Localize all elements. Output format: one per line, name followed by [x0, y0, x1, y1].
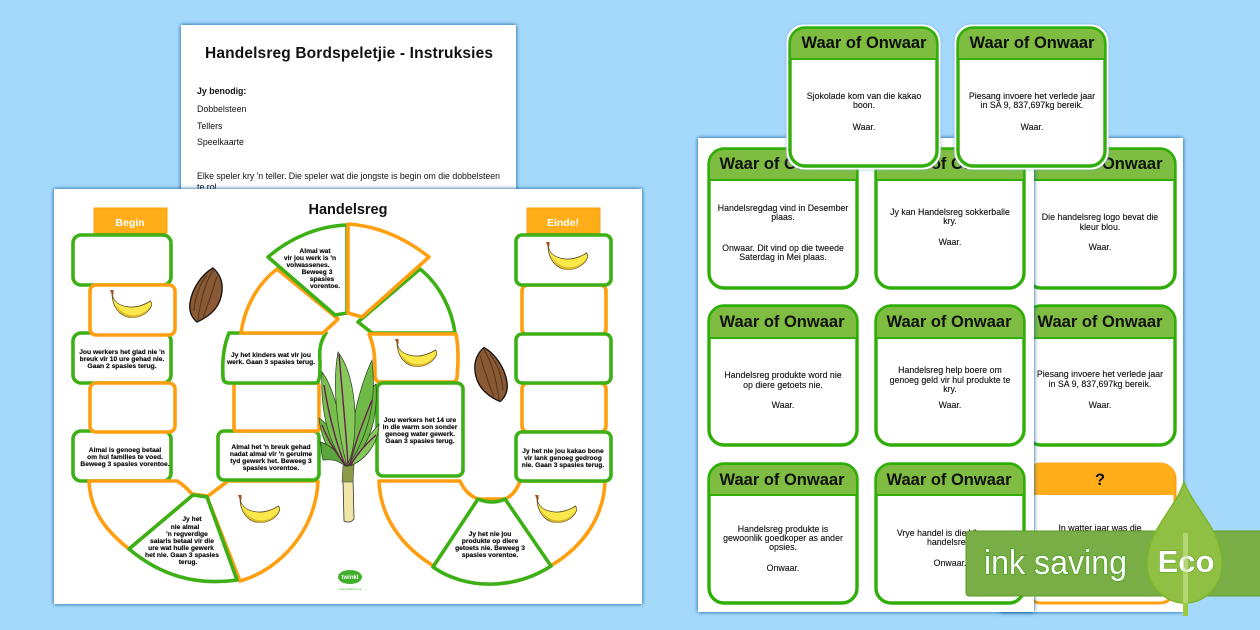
icon: drop: [1147, 482, 1222, 603]
left column text: Gaan 2 spasies terug.: [87, 363, 157, 370]
bottom left arc spaces: [89, 481, 318, 582]
inner left text: werk. Gaan 3 spasies terug.: [226, 359, 315, 366]
inner left text: Jy het kinders wat vir jou: [231, 352, 311, 359]
card: logo colour: kleur blou.: [1080, 222, 1120, 232]
logo: twinkl: www.twinkl.co.za: [339, 587, 362, 591]
bottom arc text: [455, 531, 525, 559]
sheet: back question cards: [1000, 138, 1183, 612]
left column text: om hul families te voed.: [87, 454, 163, 461]
bottom arc text: Jy het nie jou: [469, 531, 511, 538]
inner right spaces: [369, 334, 463, 476]
arc space text: terug.: [179, 559, 197, 566]
card: cheaper: [709, 464, 857, 603]
top arc text: Almal wat: [299, 248, 331, 255]
card: soccer balls: Waar.: [939, 237, 961, 247]
icon: cocoa pod right: [475, 348, 507, 402]
left column text: Jou werkers het glad nie 'n: [79, 349, 165, 356]
card: banana imports back: Piesang invoere het verlede jaar: [1037, 369, 1163, 379]
top card: banana imports: [956, 26, 1107, 168]
icon: bananas: [110, 242, 588, 523]
card: free trade: Vrye handel is die Vlag van: [897, 528, 1003, 538]
left column text: [79, 349, 170, 468]
top card: banana imports: Piesang invoere het verlede jaar: [969, 91, 1095, 101]
inner left column spaces: [218, 333, 326, 480]
eco label: Eco: [1158, 544, 1214, 579]
begin label: Begin: [115, 217, 145, 229]
board title: Handelsreg: [309, 202, 387, 218]
inner right text: Jou werkers het 14 ure: [384, 417, 457, 424]
sheet: instructions: [181, 25, 516, 200]
top arc text: vorentoe.: [310, 283, 340, 290]
top arc text: volwassenes.: [286, 262, 330, 269]
arc space text: 'n regverdige: [166, 531, 208, 538]
inner left text: [226, 352, 315, 472]
bottom arc text: spasies vorentoe.: [462, 552, 518, 559]
inner left text: tyd gewerk het. Beweeg 3: [230, 458, 312, 465]
card: farmers: Waar.: [939, 400, 961, 410]
card: soccer balls: [876, 149, 1024, 288]
right column text: [522, 448, 604, 469]
top arc text: vir jou werk is 'n: [284, 255, 336, 262]
instructions body text: Speelkaarte: [197, 137, 244, 147]
card: animal testing: Waar of Onwaar: [720, 313, 845, 331]
arc space text: Jy het: [182, 516, 202, 523]
arc space text: nie almal: [171, 524, 199, 531]
card: trade day: [709, 149, 857, 288]
inner right text: Gaan 3 spasies terug.: [385, 438, 455, 445]
top card: banana imports: in SA 9, 837,697kg bereik.: [981, 100, 1083, 110]
left column text: Beweeg 3 spasies vorentoe.: [80, 461, 170, 468]
inner right text: [383, 417, 458, 445]
card: cheaper: opsies.: [769, 542, 797, 552]
card: cheaper: gewoonlik goedkoper as ander: [723, 533, 843, 543]
card: animal testing: [709, 306, 857, 445]
card: farmers: Waar of Onwaar: [886, 313, 1012, 331]
top card: banana imports: Waar.: [1021, 122, 1043, 132]
top arc text: spasies: [310, 276, 335, 283]
card: trade day: Handelsregdag vind in Desember: [718, 203, 848, 213]
instructions body text: [197, 86, 500, 192]
card: logo colour: Waar.: [1089, 242, 1111, 252]
card: banana imports back: Waar.: [1089, 400, 1111, 410]
top card: chocolate: boon.: [853, 100, 875, 110]
right column text: nie. Gaan 3 spasies terug.: [522, 462, 604, 469]
badge: ink saving eco: [966, 482, 1260, 616]
end label: Einde!: [547, 217, 579, 229]
bottom right arc spaces: [379, 481, 605, 584]
top arc spaces: [241, 224, 455, 333]
card: banana imports back: [1026, 306, 1175, 445]
left column spaces: [73, 235, 175, 481]
begin label: [94, 208, 167, 233]
bottom arc text: produkte op diere: [462, 538, 519, 545]
icon: cocoa pod left: [190, 268, 222, 322]
drop stem: [1183, 533, 1188, 616]
bottom arc text: getoets nie. Beweeg 3: [455, 545, 525, 552]
instructions body text: Elke speler kry 'n teller. Die speler wat die jongste is begin om die dobbelsteen: [197, 171, 500, 181]
card: farmers: [876, 306, 1024, 445]
card: logo colour: Die handelsreg logo bevat die: [1042, 212, 1158, 222]
card: soccer balls: Waar of Onwaar: [886, 155, 1012, 173]
card: soccer balls: kry.: [943, 216, 957, 226]
top arc text: [284, 248, 340, 290]
inner right text: in die warm son sonder: [383, 424, 458, 431]
arc space text: het nie. Gaan 3 spasies: [145, 552, 219, 559]
instructions title: Handelsreg Bordspeletjie - Instruksies: [205, 45, 493, 62]
card: soccer balls: Jy kan Handelsreg sokkerballe: [890, 207, 1010, 217]
card: animal testing: Waar.: [772, 400, 794, 410]
top card: chocolate: Sjokolade kom van die kakao: [807, 91, 921, 101]
card: cheaper: Onwaar.: [767, 563, 799, 573]
card: question orange: [1026, 463, 1175, 603]
card: trade day: plaas.: [771, 212, 795, 222]
card: cheaper: Handelsreg produkte is: [738, 524, 829, 534]
left column text: breuk vir 10 ure gehad nie.: [80, 356, 165, 363]
card: animal testing: op diere getoets nie.: [743, 380, 823, 390]
card: farmers: kry.: [943, 384, 957, 394]
right column text: vir lank genoeg gedroog: [524, 455, 602, 462]
card: free trade: [876, 464, 1024, 603]
card: free trade: Onwaar.: [934, 558, 966, 568]
top arc text: Beweeg 3: [302, 269, 333, 276]
arc space text: salaris betaal vir die: [150, 538, 214, 545]
icon: banana plant: [319, 352, 379, 522]
top card: chocolate: Waar.: [853, 122, 875, 132]
card: trade day: Waar of Onwaar: [720, 155, 845, 173]
instructions body text: Jy benodig:: [197, 86, 246, 96]
card: farmers: Handelsreg help boere om: [898, 365, 1002, 375]
card: logo colour: Waar of Onwaar: [1038, 155, 1163, 173]
right column text: Jy het nie jou kakao bone: [522, 448, 604, 455]
logo: twinkl: [338, 570, 362, 591]
logo: twinkl: twinkl: [341, 575, 359, 581]
arc space text: ure wat hulle gewerk: [148, 545, 214, 552]
left column text: Almal is genoeg betaal: [89, 447, 161, 454]
inner left text: spasies vorentoe.: [243, 465, 299, 472]
badge text: ink saving: [984, 544, 1127, 582]
card: question orange: ?: [1095, 471, 1105, 489]
top card: chocolate: Waar of Onwaar: [802, 34, 927, 52]
card: logo colour: [1026, 149, 1175, 288]
card: free trade: Waar of Onwaar: [886, 471, 1012, 489]
card: trade day: Saterdag in Mei plaas.: [739, 252, 827, 262]
inner right text: genoeg water gewerk.: [385, 431, 455, 438]
card: free trade: handelsreg.: [927, 537, 973, 547]
sheet: front true/false cards: [698, 138, 1034, 612]
card: cheaper: Waar of Onwaar: [720, 471, 845, 489]
top card: banana imports: Waar of Onwaar: [970, 34, 1095, 52]
instructions body text: Tellers: [197, 121, 223, 131]
card: trade day: Onwaar. Dit vind op die tweede: [722, 243, 844, 253]
card: animal testing: Handelsreg produkte word nie: [724, 370, 842, 380]
top card: chocolate: [788, 26, 939, 168]
card: farmers: genoeg geld vir hul produkte te: [890, 375, 1010, 385]
instructions body text: Dobbelsteen: [197, 104, 247, 114]
arc space text: [145, 516, 219, 566]
card: banana imports back: Waar of Onwaar: [1038, 313, 1163, 331]
card: banana imports back: in SA 9, 837,697kg bereik.: [1049, 379, 1151, 389]
card: question orange: In watter jaar was die: [1058, 523, 1142, 533]
right column spaces: [516, 235, 611, 481]
end label: [527, 208, 600, 233]
inner left text: nadat almal vir 'n geruime: [230, 451, 312, 458]
sheet: board game: [54, 189, 642, 604]
instructions body text: te rol.: [197, 182, 219, 192]
inner left text: Almal het 'n breuk gehad: [231, 444, 311, 451]
